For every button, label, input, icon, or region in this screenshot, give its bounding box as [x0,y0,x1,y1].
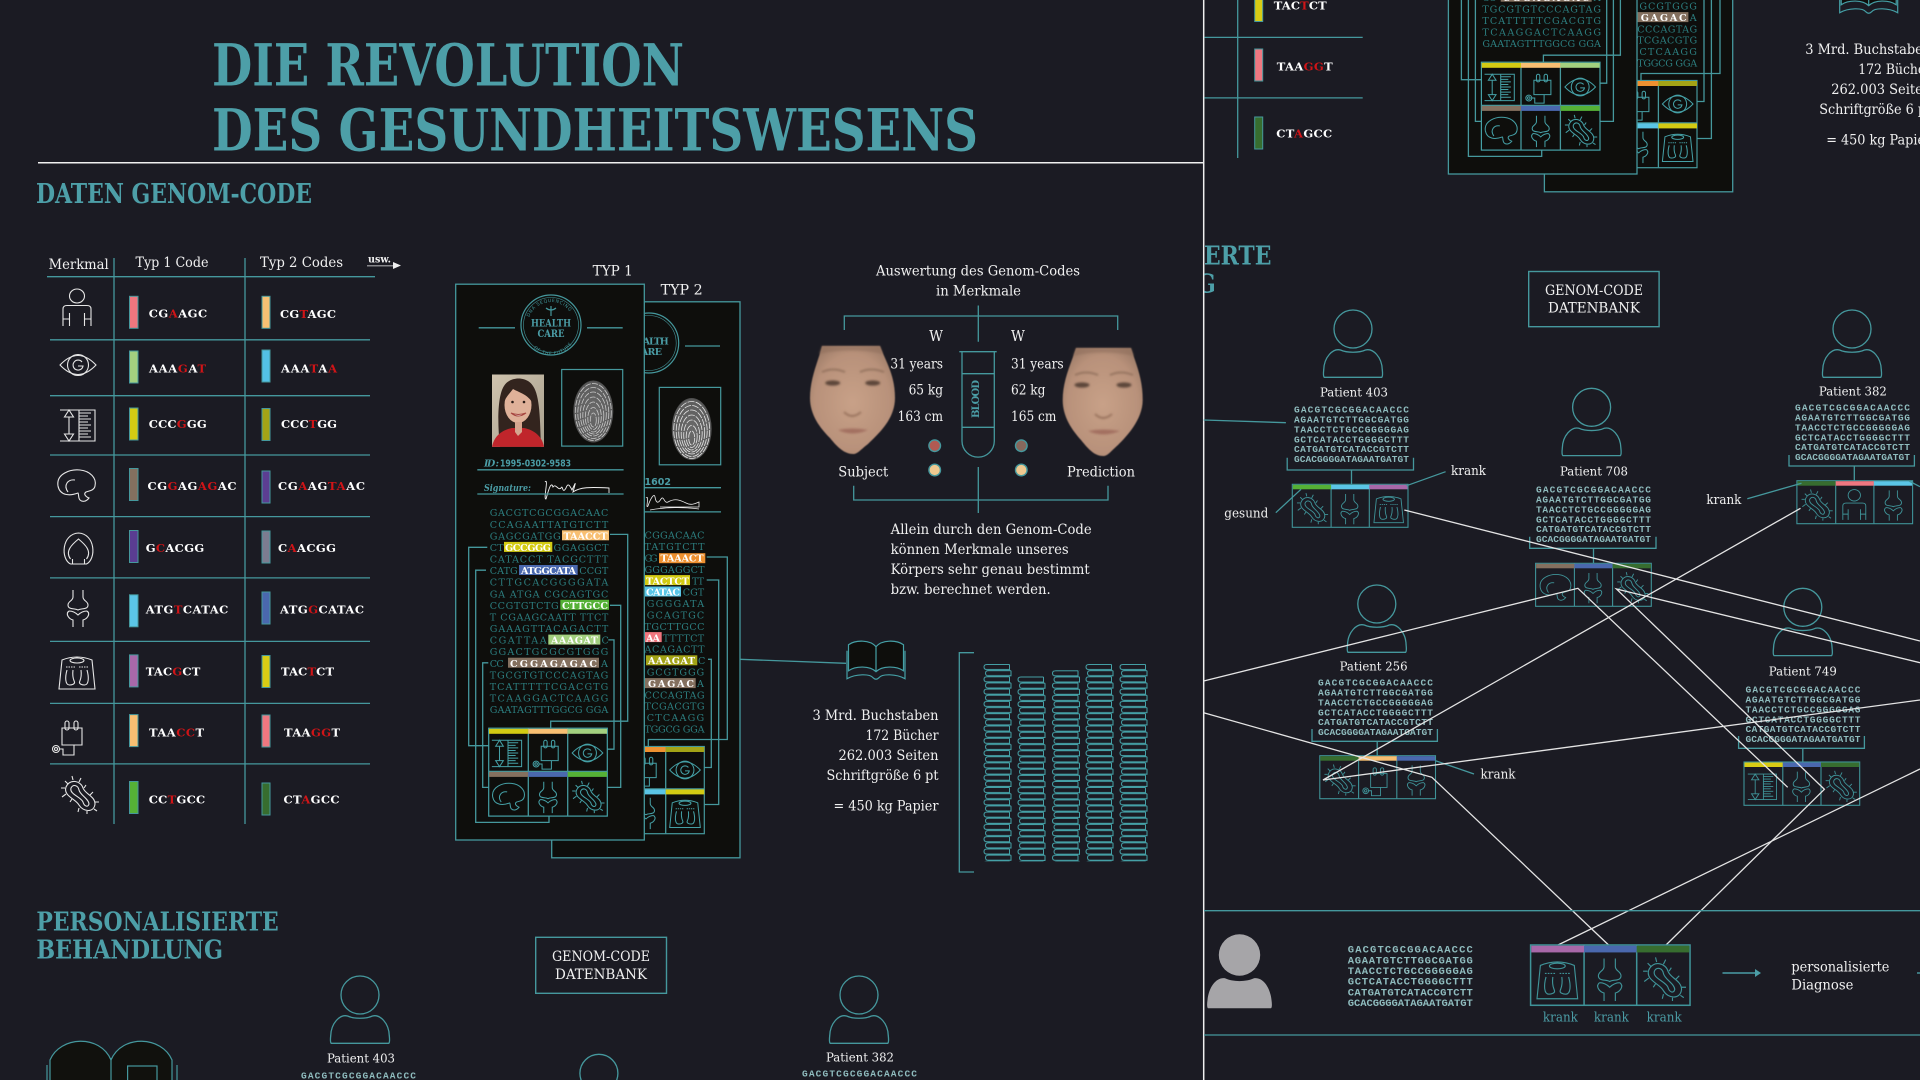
dna text: type 2: ACAGACTT [644,645,705,656]
panel: book facts [812,641,939,815]
patient 382 lower left: GACGTCGCGGACAACCC [802,1069,917,1080]
dna text: type 1: GGACTGCGCGTGGG [490,647,608,658]
patient 382: CATGATGTCATACCGTCTT [1795,442,1910,453]
heading: personalisierte Behandlung: PERSONALISIERTE [36,908,279,938]
right values [1011,327,1064,425]
genome text: CATGATGTCATACCGTCTT [1294,444,1409,455]
bracket: top [844,306,1118,342]
label: Prediction: Prediction [1067,465,1135,481]
patient 708: GCACGGGGATAGAATGATGT [1536,534,1651,545]
title [212,32,978,165]
patient 382: TAACCTCTGCCGGGGGAG [1795,422,1910,434]
network: white matching lines [1204,508,1920,945]
patient 256: Patient 256 [1340,659,1408,674]
table column headers: Merkmal [49,257,109,273]
table column headers: Typ 1 Code [136,255,208,271]
patient 708: Patient 708 [1560,464,1628,479]
connectors: type 2 [648,557,727,804]
codes type 1: GCACGG [146,541,204,555]
icon grid: type 2 [627,746,704,834]
dna text: type 1: GAAAGTTACAGACTT [490,624,609,635]
labels: krank: krank [1594,1011,1630,1026]
id number: ID : [483,459,499,470]
genome text: AGAATGTCTTGGCGATGG [1294,415,1409,426]
fingerprint: type 2 [659,387,721,465]
patient 382: krank [1706,493,1742,508]
genome text: GCTCATACCTGGGGCTTT [1294,434,1409,445]
codes type 1: TACGCT [146,664,201,678]
dna text: type 1: ATGGCATA [520,566,577,577]
text block: facts: 3 Mrd. Buchstaben [812,708,938,724]
patient 708 head lower left [580,1054,618,1080]
dna text: type 2: CTCAAGG [647,713,704,724]
dna text: type 1: TCATTTTTCGACGTG [490,682,608,693]
dna text: type 1: CCGT [579,566,609,577]
title: DES GESUNDHEITSWESENS [212,97,978,165]
codes type 2: CGAAGTAAC [278,479,365,493]
fingerprint: type 1 [562,370,623,446]
patient 749: GCTCATACCTGGGGCTTT [1746,714,1861,725]
divider: white vertical page line [1203,0,1205,1080]
dna text: type 1: GCCGGG [505,543,551,554]
connector: card to book [740,659,846,663]
signature: type 2 [646,495,699,510]
left values: W [929,327,943,345]
right page: repeated table [1204,0,1363,158]
dna text: type 2: GCGTGGG [647,668,704,678]
panel: database box right: DATENBANK [1548,301,1641,317]
dna text: type 1: CGATTAA [490,636,548,647]
dna text: type 2: TGCTTGCC [644,622,704,633]
colour swatches type 2 [262,296,270,815]
arrow stub [1917,972,1920,974]
dna text: type 1: CATACCT TACGCTTT [490,555,609,566]
codes type 1: CGAAGC [149,306,207,320]
patient 256 [1312,585,1516,799]
dna text: type 1: CT [490,543,504,554]
dots: colour traits [929,440,1027,476]
card: type 1 [455,284,645,841]
patient 708 [1530,388,1656,606]
patient 708: AGAATGTCTTGGCGATGG [1536,495,1651,506]
genome text: GCTCATACCTGGGGCTTT [1348,977,1473,989]
patient 256: GCTCATACCTGGGGCTTT [1318,707,1433,718]
dna text: type 2: GCAGTGC [647,610,704,622]
codes type 1 [145,306,236,806]
arrow [1722,969,1761,977]
patient 256: CATGATGTCATACCGTCTT [1318,717,1433,728]
panel: database box left [536,937,666,993]
codes type 2: CGTAGC [280,307,336,321]
panel: database box left: DATENBANK [555,967,648,983]
panel: database box right [1529,272,1659,327]
label: Patient 403 [1320,385,1388,400]
text: personalisierte Diagnose: Diagnose [1791,977,1853,993]
dna text: type 1: A [600,659,609,670]
genome text: GCACGGGGATAGAATGATGT [1294,454,1409,465]
table column headers [49,254,391,273]
dna text: type 2: CCCAGTAG [644,690,704,701]
photo: portrait [492,374,544,447]
logo: health care seal [520,294,582,356]
dna text: type 2: TT [692,576,705,587]
dna text: type 2: TACTCT [646,576,690,587]
genome text: TAACCTCTGCCGGGGGAG [1348,966,1473,978]
title: DIE REVOLUTION [212,32,684,100]
text block: facts: Schriftgröße 6 pt [826,768,938,784]
icon: person [1323,310,1383,377]
table column headers: Typ 2 Codes [260,255,343,271]
left values: 65 kg [909,382,943,398]
patient 256: GACGTCGCGGACAACCC [1318,678,1433,689]
codes type 2: ATGGCATAC [279,602,364,616]
right values: 31 years [1011,356,1064,372]
codes type 2: TACTCT [281,664,334,678]
dna text: type 1: CCAGAATTATGTCTT [490,520,609,531]
dna text: type 1: CGGAGAGAC [510,659,597,670]
labels: krank [1543,1011,1683,1026]
logo: type 2 seal: HEALTH [629,337,669,348]
dna text: type 2: TATGTCTT [644,542,705,553]
logo: type 2 seal [644,312,680,374]
codes type 2: TAAGGT [284,725,340,739]
patient 382: GCACGGGGATAGAATGATGT [1795,452,1910,463]
dna text: type 2: GAGAC [648,679,694,690]
logo: health care seal: DNA SEQUENCING [526,298,572,317]
patient 708: TAACCTCTGCCGGGGGAG [1536,504,1651,516]
genome text: GACGTCGCGGACAACCC [1294,405,1409,416]
dna text: type 1 [490,508,609,716]
bracket: bottom [854,467,1108,513]
colour swatches type 1 [130,296,138,814]
genome text: CATGATGTCATACCGTCTT [1348,987,1473,999]
panel: database box left: GENOM-CODE [552,949,650,965]
codes type 1: CGGAGAGAC [148,479,236,493]
patient 403 [1204,310,1487,527]
dna text: type 1: CTTGCACGGGGATA [490,578,609,589]
band: new patient diagnosis [1204,911,1920,1035]
panel: ID cards type 1 and 2 [455,264,741,858]
signature: Signature: [484,484,531,494]
labels: krank: krank [1543,1011,1579,1026]
patient 749: GACGTCGCGGACAACCC [1746,685,1861,696]
patient 403 lower left: Patient 403 [327,1051,395,1066]
patient 708: GCTCATACCTGGGGCTTT [1536,514,1651,525]
genome text: GCACGGGGATAGAATGATGT [1348,998,1473,1010]
right values: 165 cm [1011,409,1057,425]
label: Subject: Subject [838,465,888,481]
icon: grey person [1207,934,1272,1008]
dna text: type 2: GGGAGGCT [644,565,705,576]
patient 749: AGAATGTCTTGGCGATGG [1746,695,1861,706]
dna text: type 1: CATG [490,566,518,577]
dna text: type 1: GA ATGA CGCAGTGC [490,589,608,600]
heading: Daten Genom-Code: DATEN GENOM-CODE [36,179,312,210]
genome text: TAACCTCTGCCGGGGGAG [1294,424,1409,436]
patient 256: TAACCTCTGCCGGGGGAG [1318,698,1433,708]
codes type 2: CCCTGG [281,417,337,431]
patient 382: AGAATGTCTTGGCGATGG [1795,413,1910,424]
dna text: type 2: GG [644,554,658,564]
codes type 1: CCCGGG [149,417,207,431]
icon: blood tube: BLOOD [971,380,982,418]
logo: health care seal: HEALTH [531,318,571,330]
card: type 2 [552,302,740,858]
genome text [1348,945,1473,1010]
dna text: type 2: A [696,679,705,690]
logo: health care seal: OF THE FUTURE [534,342,572,354]
right values: W [1011,327,1025,345]
panel: genome code table [47,254,401,824]
codes type 2: CAACGG [278,541,336,555]
id number: 1995-0302-9583 [500,459,571,470]
codes type 1: ATGTCATAC [145,602,228,616]
chart: stacks of books [983,664,1148,861]
left values [890,327,943,425]
dna text: type 2: CGT [683,588,705,599]
dna text: type 2: TGGCG GGA [644,724,706,736]
arrow: usw [367,262,401,269]
genome text [1294,405,1409,465]
codes type 2: CTAGCC [284,792,340,806]
text block: facts: 262.003 Seiten [838,748,938,764]
trait grid [1292,484,1408,527]
text: personalisierte Diagnose [1791,960,1889,993]
patient 749: GCACGGGGATAGAATGATGT [1746,734,1861,745]
genome text: AGAATGTCTTGGCGATGG [1348,955,1473,967]
label: TYP 2: TYP 2 [661,283,703,299]
right page: repeated book facts [1805,0,1920,149]
heading: personalisierte Behandlung [36,908,279,966]
icon grid: type 1 [489,728,607,816]
text block: explanation: können Merkmale unseres [891,542,1069,558]
text block: explanation [890,522,1092,598]
dna text: type 2: CATAC [646,588,680,599]
logo: health care seal: CARE [538,328,564,340]
patient 256: AGAATGTCTTGGCGATGG [1318,688,1433,699]
text block: facts [812,708,939,815]
patient 749: CATGATGTCATACCGTCTT [1746,724,1861,735]
heading: Auswertung: in Merkmale [936,284,1021,300]
left values: 163 cm [898,409,943,425]
patient 749: TAACCTCTGCCGGGGGAG [1746,704,1861,716]
patient 382 lower left: Patient 382 [826,1050,894,1065]
text block: facts: 172 Bücher [866,728,939,744]
patient 708: GACGTCGCGGACAACCC [1536,485,1651,496]
codes type 2 [278,307,365,806]
codes type 2: AAATAA [280,361,338,375]
dna text: type 2: TCGACGTG [644,702,704,713]
callouts: gesund [1224,506,1269,521]
face: subject [810,346,895,454]
title rule [38,162,1204,164]
labels: krank: krank [1647,1011,1683,1026]
face: prediction [1063,348,1143,456]
trait grid [1531,945,1690,1005]
icon: open book [847,641,905,679]
text: personalisierte Diagnose: personalisierte [1791,960,1889,976]
card: type 2: 1602 [644,477,671,488]
dna text: type 2: CGGACAAC [644,531,704,542]
dna text: type 1: CCGTGTCTG [490,601,559,612]
signature [484,481,609,499]
patient 708: CATGATGTCATACCGTCTT [1536,524,1651,535]
heading: Auswertung: Auswertung des Genom-Codes [875,264,1080,280]
patient 403 lower left [301,976,416,1080]
icons: table feature column [52,289,99,814]
codes type 1: CCTGCC [149,792,205,806]
patient 382 lower left [802,976,917,1080]
dna text: type 1: CC [490,659,504,670]
icon: large book lower left [47,1041,177,1080]
dna text: type 1: T CGAAGCAATT TTCT [490,612,609,624]
patient 382 [1706,310,1920,524]
bracket: book stacks [959,653,974,872]
patient 382: GCTCATACCTGGGGCTTT [1795,432,1910,443]
table column headers: usw. [368,254,391,266]
callouts [1204,420,1487,521]
dna text: type 2: AAAGAT [647,656,696,667]
icon: blood tube [959,352,997,457]
dna text: type 1: AAAGAT [550,636,599,647]
patient 749: Patient 749 [1769,664,1837,679]
dna text: type 2: TTTTCT [663,633,705,644]
dna text: type 1: C [602,636,609,647]
dna text: type 2: GGGGATA [647,599,705,610]
dna text: type 1: TAACCT [564,531,608,542]
dna text: type 2 [644,531,706,736]
right page: repeated cards [1448,0,1733,192]
dna text: type 1: GAATAGTTTGGCG GGA [490,705,609,716]
callouts: krank [1451,464,1487,479]
dna text: type 1: CTTGCC [562,601,608,612]
panel: evaluation of the genome code [810,264,1143,598]
patient 256: krank [1480,767,1516,782]
dna text: type 1: TCAAGGACTCAAGG [490,694,608,704]
patient 382: GACGTCGCGGACAACCC [1795,403,1910,414]
heading: Auswertung [875,264,1080,300]
dna text: type 2: TAAACT [660,554,704,564]
dna text: type 2: AA [645,633,661,644]
codes type 1: TAACCT [149,725,204,739]
text block: facts: = 450 kg Papier [834,799,939,815]
genome text: GACGTCGCGGACAACCC [1348,945,1473,957]
right page: repeated heading [1204,246,1270,293]
text block: explanation: bzw. berechnet werden. [891,582,1051,598]
text block: explanation: Allein durch den Genom-Code [890,522,1092,538]
patient 382: Patient 382 [1819,383,1887,398]
dna text: type 1: GAGCGATGG [490,531,561,542]
patient 256: GCACGGGGATAGAATGATGT [1318,727,1433,738]
dna text: type 1: TGCGTGTCCCAGTAG [490,670,608,681]
panel: database box right: GENOM-CODE [1545,283,1643,299]
text block: explanation: Körpers sehr genau bestimmt [891,562,1090,578]
patient 749 [1739,588,1864,805]
dna text: type 1: GACGTCGCGGACAAC [490,508,608,519]
id number [483,459,571,470]
logo: type 2 seal: CARE [634,347,662,358]
right values: 62 kg [1011,382,1046,398]
connectors: type 1 [469,534,628,822]
dna text: type 2: C [698,656,705,667]
codes type 1: AAAGAT [148,361,206,375]
left values: 31 years [890,356,943,372]
heading: personalisierte Behandlung: BEHANDLUNG [36,936,223,966]
dna text: type 1: GGAGGCT [554,543,609,554]
label: TYP 1: TYP 1 [593,264,633,280]
